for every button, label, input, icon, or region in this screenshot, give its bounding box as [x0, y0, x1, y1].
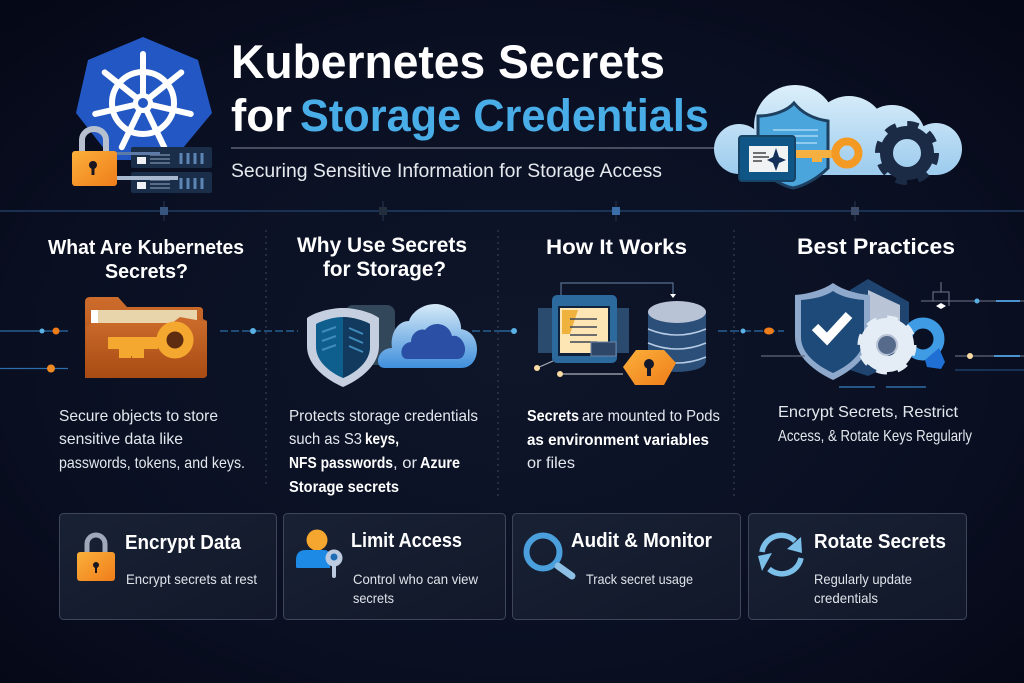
panel: What Are Kubernetes Secrets: [0, 236, 245, 472]
card: Encrypt Data: Encrypt secrets at rest: [126, 571, 257, 587]
body text: as environment variables: [527, 432, 709, 449]
body text: Azure: [420, 455, 460, 472]
card: Limit Access: Control who can view: [353, 571, 479, 587]
body text: Access, & Rotate Keys Regularly: [778, 428, 972, 445]
icon: cloud with shield, document, key and gear: [714, 85, 962, 188]
title: Storage Credentials: [300, 90, 709, 141]
heading: why use secrets: for Storage?: [323, 258, 446, 281]
body text: are mounted to Pods: [582, 408, 720, 425]
body text: or files: [527, 455, 575, 472]
body text: [778, 404, 972, 445]
heading: best practices: Best Practices: [797, 234, 955, 259]
icon: shield and cloud: [307, 304, 477, 387]
body text: Secrets: [527, 408, 579, 425]
body text: NFS passwords: [289, 455, 393, 472]
card: Rotate Secrets: Regularly update: [814, 571, 912, 587]
decorative connectors: [761, 282, 1024, 387]
heading: how it works: How It Works: [546, 235, 687, 259]
icon: user with key: [296, 530, 342, 578]
decorative connectors: [220, 328, 500, 334]
icon: rotate arrows: [758, 535, 802, 574]
card: Rotate Secrets: [748, 514, 966, 620]
card: Audit & Monitor: Audit & Monitor: [571, 530, 712, 552]
card: Encrypt Data: [60, 514, 276, 620]
body text: Secure objects to store: [59, 408, 218, 425]
title: [231, 35, 709, 141]
body text: , or: [393, 455, 418, 472]
heading: why use secrets: Why Use Secrets: [297, 234, 467, 257]
body text: [527, 408, 720, 472]
body text: [59, 408, 245, 472]
body text: sensitive data like: [59, 431, 183, 448]
decorative connectors: [500, 328, 784, 334]
body text: Protects storage credentials: [289, 408, 478, 425]
card: Limit Access: Limit Access: [351, 530, 462, 552]
body text: such as S3: [289, 431, 362, 448]
card: Limit Access: secrets: [353, 590, 394, 606]
body text: Encrypt Secrets, Restrict: [778, 404, 959, 421]
heading: what are secrets: What Are Kubernetes: [48, 236, 244, 259]
heading: what are secrets: Secrets?: [105, 260, 188, 283]
icon: pod document connected to database: [534, 283, 706, 385]
icon: folder with key: [85, 297, 207, 378]
card: Rotate Secrets: Rotate Secrets: [814, 531, 946, 553]
icon: magnifying glass: [526, 536, 572, 576]
icon: shield, gear and blue key: [795, 279, 945, 380]
panel: Why Use Secrets for Storage: [220, 234, 500, 496]
panel: How It Works: [500, 235, 784, 472]
card: Encrypt Data: Encrypt Data: [125, 532, 242, 554]
heading: why use secrets: [297, 234, 467, 281]
title: for: [231, 90, 292, 141]
heading: what are secrets: [48, 236, 244, 283]
decorative connectors: [0, 328, 68, 372]
body text: [289, 408, 478, 496]
icon: Kubernetes logo with padlock and servers: [72, 37, 212, 193]
title: Kubernetes Secrets: [231, 35, 665, 88]
card: Audit & Monitor: [512, 514, 740, 620]
body text: keys,: [365, 431, 399, 448]
card: Audit & Monitor: Track secret usage: [586, 571, 693, 587]
card: Limit Access: [284, 514, 506, 620]
subtitle: Securing Sensitive Information for Storage Access: [231, 161, 662, 182]
panel: Best Practices: [761, 234, 1024, 445]
card: Rotate Secrets: credentials: [814, 590, 878, 606]
body text: Storage secrets: [289, 479, 399, 496]
icon: padlock: [77, 535, 115, 581]
body text: passwords, tokens, and keys.: [59, 455, 245, 472]
timeline rule with nodes: [0, 201, 1024, 221]
